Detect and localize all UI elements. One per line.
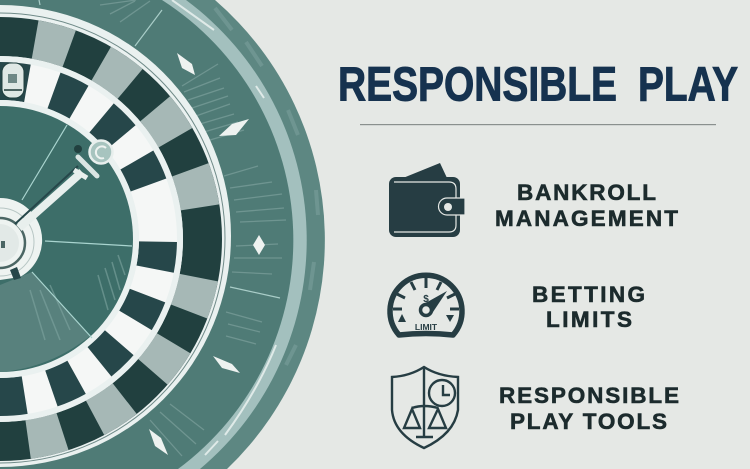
- disc shading: [0, 272, 90, 372]
- icon: limit gauge: LIMIT: [415, 322, 438, 332]
- disc sheen: [30, 255, 125, 340]
- icon: limit gauge: $: [423, 294, 429, 305]
- wheel arm: [15, 140, 112, 228]
- label: responsible play tools: PLAY TOOLS: [510, 409, 667, 434]
- item: bankroll management: [389, 163, 678, 237]
- white inner ring: [0, 100, 139, 378]
- inner pockets: [0, 81, 158, 397]
- icon: limit gauge: [390, 275, 462, 335]
- wheel outer rim: [0, 0, 325, 469]
- outer pockets: [0, 36, 202, 442]
- divider: [360, 124, 716, 125]
- icon: shield with scales and clock: [392, 367, 458, 448]
- white outer ring: [0, 5, 231, 467]
- track texture: [100, 0, 286, 456]
- icon: wallet: [389, 163, 465, 237]
- title: RESPONSIBLE: [338, 58, 617, 112]
- label: betting limits: [532, 282, 645, 332]
- label: responsible play tools: [499, 383, 679, 434]
- label: bankroll management: MANAGEMENT: [495, 206, 678, 231]
- label: bankroll management: BANKROLL: [517, 180, 656, 205]
- item: betting limits: [390, 275, 645, 335]
- label: betting limits: BETTING: [532, 282, 645, 307]
- label: bankroll management: [495, 180, 678, 231]
- disc spokes: [22, 125, 132, 338]
- centre hub: [0, 198, 42, 280]
- wheel light band: [0, 0, 307, 469]
- inner green disc: [0, 106, 133, 372]
- wheel green track: [0, 0, 293, 469]
- ring line: [0, 13, 225, 463]
- label: responsible play tools: RESPONSIBLE: [499, 383, 679, 408]
- rim highlights: [172, 0, 276, 455]
- outer rim wear: [215, 8, 318, 365]
- label: betting limits: LIMITS: [546, 307, 632, 332]
- white middle ring: [0, 59, 180, 419]
- pocket icon: [2, 63, 24, 98]
- roulette wheel: [0, 0, 325, 469]
- track diamonds: [149, 53, 265, 455]
- item: responsible play tools: [392, 367, 679, 448]
- track spokes: [39, 0, 280, 298]
